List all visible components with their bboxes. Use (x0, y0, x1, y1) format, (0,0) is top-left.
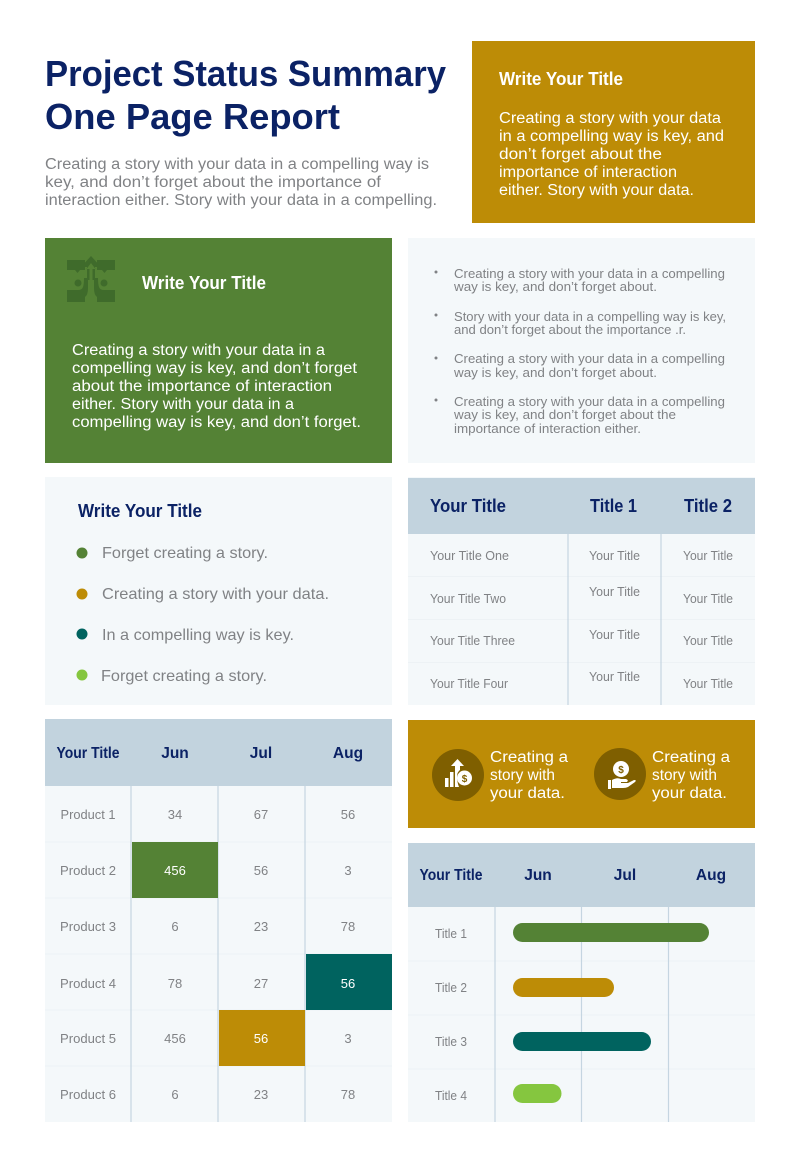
bullet items: importance of interaction either. (454, 422, 641, 436)
intro text (45, 156, 437, 209)
gold callout text: don’t forget about the (499, 146, 662, 163)
bullet items: Creating a story with your data in a compelling (454, 267, 725, 281)
gantt row labels (435, 926, 467, 1103)
gantt header: Aug (696, 867, 726, 884)
products header: Jun (161, 745, 189, 762)
products values: 456 (164, 1031, 186, 1046)
gantt header (420, 867, 726, 884)
panel: bullet list (408, 238, 755, 463)
legend items: In a compelling way is key. (102, 627, 294, 644)
gantt chart (408, 843, 755, 1122)
table rows: Your Title Three (430, 633, 515, 648)
icon text two: Creating a (652, 749, 730, 766)
products values: 3 (344, 863, 352, 878)
products values: 456 (164, 863, 186, 878)
products values: 6 (171, 1087, 179, 1102)
bullet items: and don’t forget about the importance .r. (454, 323, 686, 337)
gantt header: Jun (524, 867, 552, 884)
icon text two: your data. (652, 785, 727, 802)
gold callout heading: Write Your Title (499, 69, 623, 89)
gold callout text: either. Story with your data. (499, 182, 694, 199)
products values: Product 6 (60, 1087, 116, 1102)
products header: Jul (250, 745, 272, 762)
products values: Product 5 (60, 1031, 116, 1046)
table rows: Your Title (683, 633, 733, 648)
gantt header: Your Title (420, 867, 483, 884)
table: products (45, 719, 392, 1122)
table rows: Your Title One (430, 548, 509, 563)
table header: Title 1 (590, 496, 637, 516)
panel: gold icon strip (408, 720, 755, 828)
green callout text: Creating a story with your data in a (72, 342, 325, 359)
panel: gold callout (472, 41, 755, 223)
icon text one: Creating a (490, 749, 568, 766)
panel: legend list (45, 477, 392, 705)
products values: 78 (168, 976, 182, 991)
legend items: Forget creating a story. (102, 545, 268, 562)
icon text two (652, 749, 730, 802)
icon: rising coins (432, 749, 484, 801)
green callout text: compelling way is key, and don’t forget (72, 360, 358, 377)
table rows: Your Title (589, 584, 640, 599)
table rows: Your Title (589, 548, 640, 563)
products values: 34 (168, 807, 182, 822)
title: One Page Report (45, 96, 340, 137)
intro text: Creating a story with your data in a compelling way is (45, 156, 429, 173)
products values: 23 (254, 919, 268, 934)
table rows: Your Title Four (430, 676, 509, 691)
icon: rising coins: $ (462, 774, 468, 785)
legend heading: Write Your Title (78, 501, 202, 521)
green callout text: either. Story with your data in a (72, 396, 294, 413)
bullet items: way is key, and don’t forget about. (453, 280, 657, 294)
gold callout text: Creating a story with your data (499, 110, 721, 127)
products values: 56 (254, 1031, 268, 1046)
products values: Product 3 (60, 919, 116, 934)
gold callout text: in a compelling way is key, and (499, 128, 724, 145)
bullet items: Creating a story with your data in a compelling (454, 395, 725, 409)
bullet items: way is key, and don’t forget about. (453, 366, 657, 380)
table: titles (408, 477, 755, 705)
products values: 78 (341, 919, 355, 934)
gantt header: Jul (614, 867, 636, 884)
green callout heading: Write Your Title (142, 273, 266, 293)
green callout text: compelling way is key, and don’t forget. (72, 414, 361, 431)
table rows: Your Title (589, 669, 640, 684)
products values: Product 1 (60, 807, 116, 822)
products values: 67 (254, 807, 268, 822)
icon: converging arrows (67, 256, 115, 302)
table rows (430, 548, 733, 691)
table rows: Your Title Two (430, 591, 506, 606)
products values: Product 4 (60, 976, 116, 991)
table rows: Your Title (683, 548, 733, 563)
bullet items: way is key, and don’t forget about the (453, 408, 676, 422)
legend items: Forget creating a story. (101, 668, 267, 685)
products values: 27 (254, 976, 268, 991)
products header: Aug (333, 745, 363, 762)
table rows: Your Title (683, 591, 733, 606)
icon: hand with coin (594, 748, 646, 800)
gantt row labels: Title 4 (435, 1088, 467, 1103)
table header: Title 2 (684, 496, 732, 516)
legend items (76, 545, 329, 685)
icon text one (490, 749, 568, 802)
icon text one: story with (490, 767, 555, 784)
products header: Your Title (56, 745, 120, 762)
legend items: Creating a story with your data. (102, 586, 329, 603)
intro text: interaction either. Story with your data in a compelling. (45, 192, 437, 209)
green callout text: about the importance of interaction (72, 378, 332, 395)
gantt row labels: Title 2 (435, 980, 467, 995)
gold callout text: importance of interaction (499, 164, 677, 181)
products header (56, 745, 363, 762)
bullet items: Story with your data in a compelling way is key, (454, 310, 726, 324)
products values: 6 (171, 919, 179, 934)
green callout text (72, 342, 361, 431)
products values (60, 807, 355, 1102)
bullet items (434, 267, 726, 436)
gantt row labels: Title 1 (435, 926, 467, 941)
gantt bars (513, 923, 709, 1103)
title (45, 53, 446, 137)
gold callout text (499, 110, 724, 199)
bullet items: Creating a story with your data in a compelling (454, 352, 725, 366)
products values: 78 (341, 1087, 355, 1102)
products values: 3 (344, 1031, 352, 1046)
products values: 23 (254, 1087, 268, 1102)
gantt row labels: Title 3 (435, 1034, 467, 1049)
title: Project Status Summary (45, 53, 446, 94)
icon: hand with coin: $ (618, 765, 624, 776)
icon text one: your data. (490, 785, 565, 802)
intro text: key, and don’t forget about the importance of (45, 174, 382, 191)
panel: green callout (45, 238, 392, 463)
products values: 56 (341, 976, 355, 991)
table header: Your Title (430, 496, 506, 516)
table header (430, 496, 732, 516)
products values: Product 2 (60, 863, 116, 878)
table rows: Your Title (683, 676, 733, 691)
icon text two: story with (652, 767, 717, 784)
table rows: Your Title (589, 627, 640, 642)
highlighted cells (132, 842, 392, 1066)
products values: 56 (341, 807, 355, 822)
products values: 56 (254, 863, 268, 878)
